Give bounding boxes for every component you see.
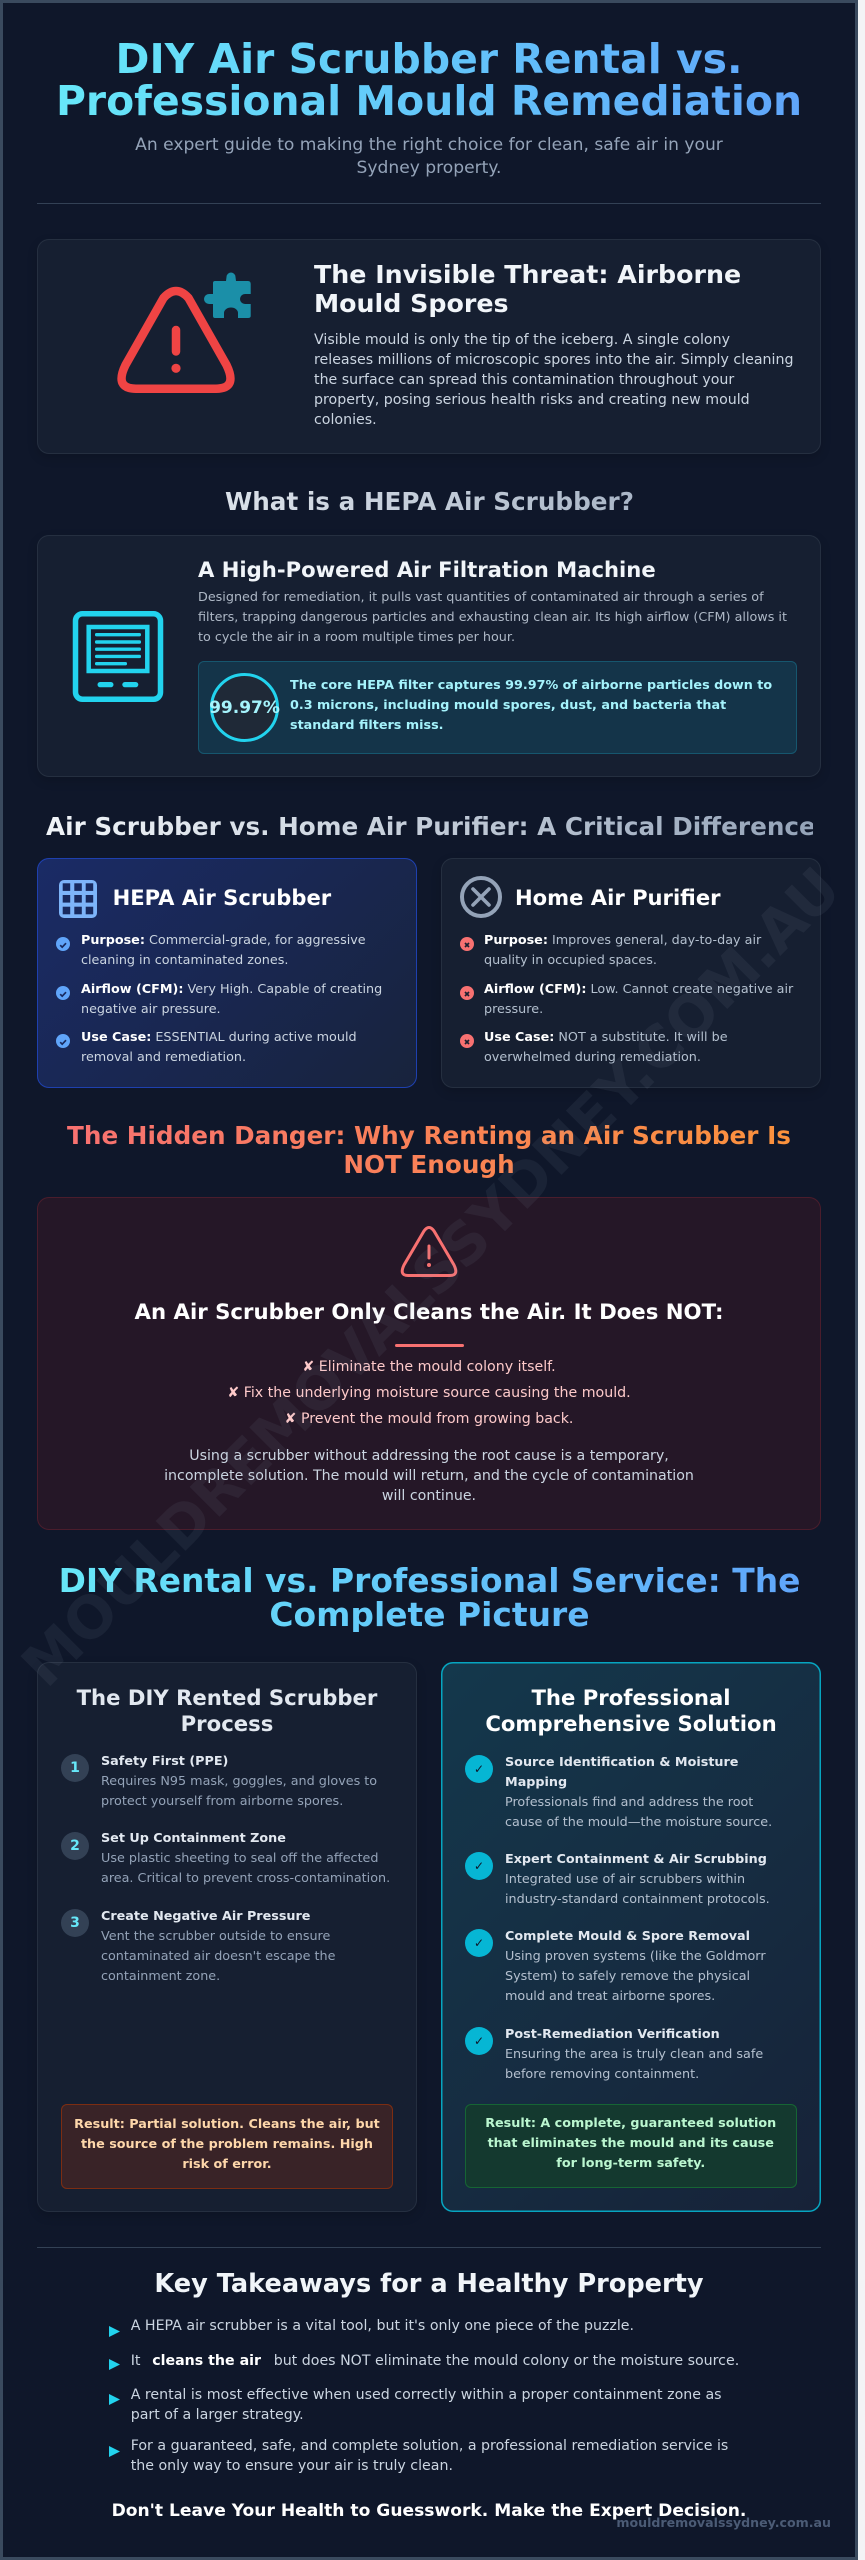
card heading: The Invisible Threat: Airborne xyxy=(314,260,741,289)
step text: Requires N95 mask, goggles, and gloves to xyxy=(101,1774,377,1789)
takeaway 2 xyxy=(100,2351,760,2375)
check badge: ✓ xyxy=(474,1936,484,1950)
text: A HEPA air scrubber is a vital tool, but it's only one piece of the puzzle. xyxy=(131,2318,634,2334)
heading: key takeaways: Key Takeaways for a Healthy Property xyxy=(154,2269,704,2299)
step text: protect yourself from airborne spores. xyxy=(101,1794,343,1809)
card text: the surface can spread this contamination throughout your xyxy=(314,372,734,388)
result text: for long-term safety. xyxy=(556,2156,705,2171)
subtitle: An expert guide to making the right choice for clean, safe air in your xyxy=(135,135,723,155)
heading: DIY vs professional: DIY Rental vs. Professional Service: The xyxy=(59,1561,800,1600)
step text: Use plastic sheeting to seal off the affected xyxy=(101,1851,378,1866)
step text: industry-standard containment protocols. xyxy=(505,1892,770,1907)
card heading: Mould Spores xyxy=(314,289,509,318)
number badge: 1 xyxy=(70,1760,80,1776)
text xyxy=(131,2385,722,2425)
panel: professional solution xyxy=(441,1662,821,2212)
title: Professional Mould Remediation xyxy=(56,77,802,125)
result: complete xyxy=(465,2104,796,2188)
card text: filters, trapping dangerous particles and exhausting clean air. Its high airflow (CFM) allows it xyxy=(198,610,787,625)
title: DIY Air Scrubber Rental vs. xyxy=(116,34,742,82)
item: airflow xyxy=(460,982,794,1017)
step text xyxy=(101,1754,377,1809)
result text: Result: A complete, guaranteed solution xyxy=(485,2116,776,2131)
panel: invisible threat xyxy=(37,239,821,454)
text: Use Case: ESSENTIAL during active mould xyxy=(81,1030,357,1045)
list: what it does not do: ✘ Prevent the mould from growing back. xyxy=(285,1411,573,1427)
step 4 xyxy=(465,2027,763,2082)
call to action: Don't Leave Your Health to Guesswork. Make the Expert Decision. xyxy=(112,2501,746,2521)
step text: containment zone. xyxy=(101,1969,220,1984)
callout text: incomplete solution. The mould will return, and the cycle of contamination xyxy=(164,1468,694,1484)
number badge xyxy=(61,1832,89,1860)
panel: home air purifier xyxy=(441,858,821,1088)
item: purpose xyxy=(460,933,762,968)
icon: check xyxy=(56,986,70,1000)
step text: Integrated use of air scrubbers within xyxy=(505,1872,745,1887)
check badge xyxy=(465,1929,493,1957)
card text: releases millions of microscopic spores into the air. Simply cleaning xyxy=(314,352,793,368)
check badge: ✓ xyxy=(474,1859,484,1873)
icon: cross xyxy=(460,1034,474,1048)
result text: Result: Partial solution. Cleans the air, but xyxy=(74,2117,380,2132)
icon: cross xyxy=(460,937,474,951)
text: the only way to ensure your air is truly clean. xyxy=(131,2458,453,2474)
text xyxy=(131,2351,751,2371)
text: part of a larger strategy. xyxy=(131,2407,304,2423)
step 1 xyxy=(465,1755,772,1830)
panel: danger callout xyxy=(37,1197,821,1530)
card text: Designed for remediation, it pulls vast quantities of contaminated air through a series of xyxy=(198,590,764,605)
heading: DIY vs professional xyxy=(56,1564,803,1632)
step text: mould and treat airborne spores. xyxy=(505,1989,715,2004)
check badge: ✓ xyxy=(474,2034,484,2048)
step text xyxy=(505,1852,770,1907)
heading: The Professional xyxy=(531,1684,731,1710)
item: airflow xyxy=(56,982,382,1017)
callout text xyxy=(164,1448,694,1504)
takeaway 1 xyxy=(100,2316,760,2340)
stat text: standard filters miss. xyxy=(290,718,444,733)
heading: The DIY Rented Scrubber xyxy=(77,1684,377,1710)
step text: Safety First (PPE) xyxy=(101,1754,228,1769)
stat text xyxy=(290,678,772,733)
text xyxy=(81,933,366,968)
takeaway 4 xyxy=(100,2436,760,2480)
check badge: ✓ xyxy=(474,1762,484,1776)
panel: HEPA air scrubber xyxy=(37,858,417,1088)
icon: arrow xyxy=(109,2359,120,2370)
text: A rental is most effective when used correctly within a proper containment zone as xyxy=(131,2387,722,2403)
subtitle xyxy=(135,135,723,178)
result text: that eliminates the mould and its cause xyxy=(488,2136,774,2151)
number badge xyxy=(61,1754,89,1782)
text xyxy=(131,2436,728,2476)
stat circle xyxy=(210,673,279,742)
step text: Using proven systems (like the Goldmorr xyxy=(505,1949,766,1964)
text: Airflow (CFM): Very High. Capable of creating xyxy=(81,982,382,997)
list: what it does not do: ✘ Fix the underlying moisture source causing the mould. xyxy=(227,1385,631,1401)
callout text: Using a scrubber without addressing the root cause is a temporary, xyxy=(189,1448,669,1464)
card text: to cycle the air in a room multiple times per hour. xyxy=(198,630,515,645)
step 3 xyxy=(61,1909,335,1984)
item: purpose xyxy=(56,933,366,968)
heading: what is a HEPA air scrubber: What is a HEPA Air Scrubber? xyxy=(225,487,634,516)
result: partial xyxy=(61,2104,393,2189)
card text: property, posing serious health risks and creating new mould xyxy=(314,392,750,408)
text: Purpose: Commercial-grade, for aggressive xyxy=(81,933,366,948)
title xyxy=(55,38,803,122)
text xyxy=(81,982,382,1017)
step text: cause of the mould—the moisture source. xyxy=(505,1815,772,1830)
heading xyxy=(76,1684,378,1736)
text: cleans the air xyxy=(152,2353,261,2369)
heading: hidden danger xyxy=(64,1121,794,1179)
icon: cross xyxy=(460,986,474,1000)
card text: Visible mould is only the tip of the iceberg. A single colony xyxy=(314,332,730,348)
stat text: The core HEPA filter captures 99.97% of airborne particles down to xyxy=(290,678,772,693)
check badge xyxy=(465,1852,493,1880)
step text: System) to safely remove the physical xyxy=(505,1969,750,1984)
text: It xyxy=(131,2353,140,2369)
heading: Process xyxy=(181,1710,273,1736)
step text: before removing containment. xyxy=(505,2067,699,2082)
step text: Expert Containment & Air Scrubbing xyxy=(505,1852,767,1867)
result text xyxy=(74,2117,380,2172)
icon: air scrubber machine xyxy=(72,611,164,702)
text: removal and remediation. xyxy=(81,1050,246,1065)
heading: HEPA Air Scrubber xyxy=(113,885,331,910)
result text xyxy=(465,2114,796,2174)
takeaway 3 xyxy=(100,2385,760,2429)
step text: area. Critical to prevent cross-contamination. xyxy=(101,1871,390,1886)
text: cleaning in contaminated zones. xyxy=(81,953,288,968)
step text: contaminated air doesn't escape the xyxy=(101,1949,335,1964)
step text: Create Negative Air Pressure xyxy=(101,1909,310,1924)
card text xyxy=(198,590,787,645)
icon: check xyxy=(56,1034,70,1048)
callout text: will continue. xyxy=(382,1488,476,1504)
step text: Mapping xyxy=(505,1775,567,1790)
heading: DIY vs professional: Complete Picture xyxy=(269,1595,590,1634)
panel: DIY process xyxy=(37,1662,417,2212)
list: what it does not do xyxy=(227,1359,631,1427)
step text: Ensuring the area is truly clean and safe xyxy=(505,2047,763,2062)
step text xyxy=(505,1755,772,1830)
heading: scrubber vs purifier: Air Scrubber vs. Home Air Purifier: A Critical Difference xyxy=(46,812,816,841)
icon: arrow xyxy=(109,2446,120,2457)
step text xyxy=(505,1929,766,2004)
footer website: mouldremovalssydney.com.au xyxy=(616,2515,831,2530)
text xyxy=(484,982,794,1017)
heading xyxy=(485,1684,777,1736)
step 1 xyxy=(61,1754,377,1809)
text: Use Case: NOT a substitute. It will be xyxy=(484,1030,728,1045)
subtitle: Sydney property. xyxy=(357,158,501,178)
callout: 99.97% stat xyxy=(198,661,797,754)
icon: warning triangle xyxy=(400,1226,458,1277)
watermark: MOULDREMOVALSSYDNEY.COM.AU xyxy=(8,854,854,1700)
text: overwhelmed during remediation. xyxy=(484,1050,701,1065)
step text xyxy=(101,1909,335,1984)
icon: arrow xyxy=(109,2326,120,2337)
check badge xyxy=(465,1755,493,1783)
step text: Complete Mould & Spore Removal xyxy=(505,1929,750,1944)
item: use case xyxy=(460,1030,728,1065)
text xyxy=(81,1030,357,1065)
card text: colonies. xyxy=(314,412,377,428)
text xyxy=(484,933,762,968)
number badge: 3 xyxy=(70,1915,80,1931)
step text: Set Up Containment Zone xyxy=(101,1831,286,1846)
step text: Vent the scrubber outside to ensure xyxy=(101,1929,330,1944)
heading: hidden danger: NOT Enough xyxy=(343,1150,515,1179)
heading: hidden danger: The Hidden Danger: Why Renting an Air Scrubber Is xyxy=(67,1121,791,1150)
icon: arrow xyxy=(109,2394,120,2405)
heading: Comprehensive Solution xyxy=(485,1710,777,1736)
text: Purpose: Improves general, day-to-day air xyxy=(484,933,761,948)
text: negative air pressure. xyxy=(81,1002,221,1017)
number badge xyxy=(61,1909,89,1937)
text: but does NOT eliminate the mould colony or the moisture source. xyxy=(274,2353,739,2369)
result text: the source of the problem remains. High xyxy=(81,2137,373,2152)
step text: Source Identification & Moisture xyxy=(505,1755,738,1770)
item: use case xyxy=(56,1030,357,1065)
card heading xyxy=(314,260,741,318)
step 3 xyxy=(465,1929,766,2004)
result text: risk of error. xyxy=(182,2157,272,2172)
step text: Post-Remediation Verification xyxy=(505,2027,720,2042)
step 2 xyxy=(465,1852,770,1907)
text: For a guaranteed, safe, and complete solution, a professional remediation service is xyxy=(131,2438,728,2454)
icon: check xyxy=(56,937,70,951)
callout heading: An Air Scrubber Only Cleans the Air. It Does NOT: xyxy=(135,1300,723,1325)
text: quality in occupied spaces. xyxy=(484,953,657,968)
step text xyxy=(101,1831,390,1886)
check badge xyxy=(465,2027,493,2055)
card heading: A High-Powered Air Filtration Machine xyxy=(198,557,656,582)
text xyxy=(484,1030,728,1065)
text: pressure. xyxy=(484,1002,543,1017)
stat value: 99.97% xyxy=(209,698,280,718)
icon: warning triangle with mould spore xyxy=(117,272,251,393)
icon: filter grid xyxy=(59,880,97,918)
step text xyxy=(505,2025,763,2085)
step text: Professionals find and address the root xyxy=(505,1795,753,1810)
text: Airflow (CFM): Low. Cannot create negative air xyxy=(484,982,793,997)
panel: high-powered machine xyxy=(37,535,821,777)
heading: Home Air Purifier xyxy=(515,885,721,910)
step 2 xyxy=(61,1831,390,1886)
icon: crossed circle xyxy=(460,876,502,918)
list: what it does not do: ✘ Eliminate the mould colony itself. xyxy=(302,1359,556,1375)
stat text: 0.3 microns, including mould spores, dust, and bacteria that xyxy=(290,698,726,713)
list: takeaways xyxy=(100,2310,760,2480)
number badge: 2 xyxy=(70,1838,80,1854)
heading: what is a HEPA air scrubber xyxy=(46,487,813,517)
card text xyxy=(314,332,793,428)
